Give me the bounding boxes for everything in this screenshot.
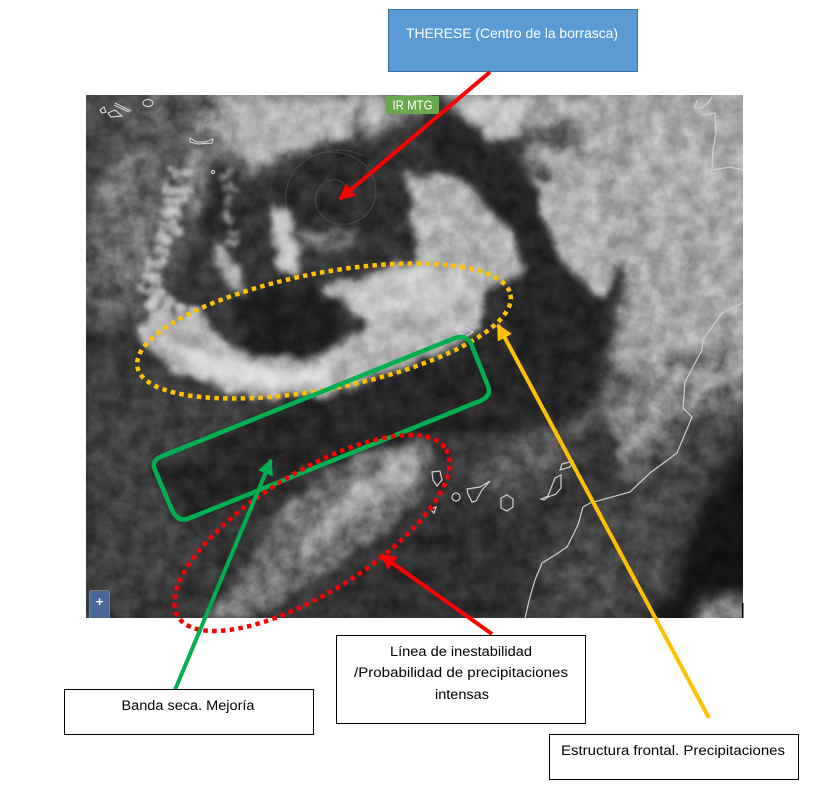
box: frontal structure: Estructura frontal. Precipitaciones [561, 743, 785, 758]
light streaks near coast [610, 360, 743, 460]
bright cloud band and central mass [138, 100, 735, 397]
label: IR MTG: IR MTG [392, 98, 432, 112]
red dotted ellipse: instability line [146, 398, 478, 668]
coastlines and islands [100, 97, 743, 618]
arrow: frontal structure [498, 325, 709, 718]
map edge detail [742, 603, 744, 618]
satellite image [86, 95, 743, 618]
zoom button [90, 590, 110, 620]
arrow: dry band [175, 460, 271, 690]
box: instability line: Línea de inestabilidad [390, 644, 532, 659]
vortex spiral [286, 150, 376, 224]
box: instability line: /Probabilidad de precipitaciones [354, 665, 568, 680]
green rounded box: dry band [154, 337, 489, 519]
box: THERESE: THERESE (Centro de la borrasca) [406, 25, 618, 41]
arrow: storm centre [340, 72, 490, 199]
box: dry band [64, 690, 314, 734]
box: dry band: Banda seca. Mejoría [122, 698, 255, 713]
box: frontal structure [550, 734, 798, 780]
yellow dotted ellipse: frontal structure [126, 238, 522, 424]
broad cloud masses [86, 95, 743, 618]
box: THERESE [388, 10, 638, 72]
dark air bands [150, 108, 620, 618]
box: instability line [336, 636, 586, 724]
arrow: instability line [381, 555, 492, 634]
zoom button: + [96, 594, 104, 609]
cloud texture [86, 95, 743, 618]
speckled left cloud band [150, 170, 235, 318]
box: instability line: intensas [435, 687, 489, 702]
line of instability cloud [205, 438, 432, 622]
